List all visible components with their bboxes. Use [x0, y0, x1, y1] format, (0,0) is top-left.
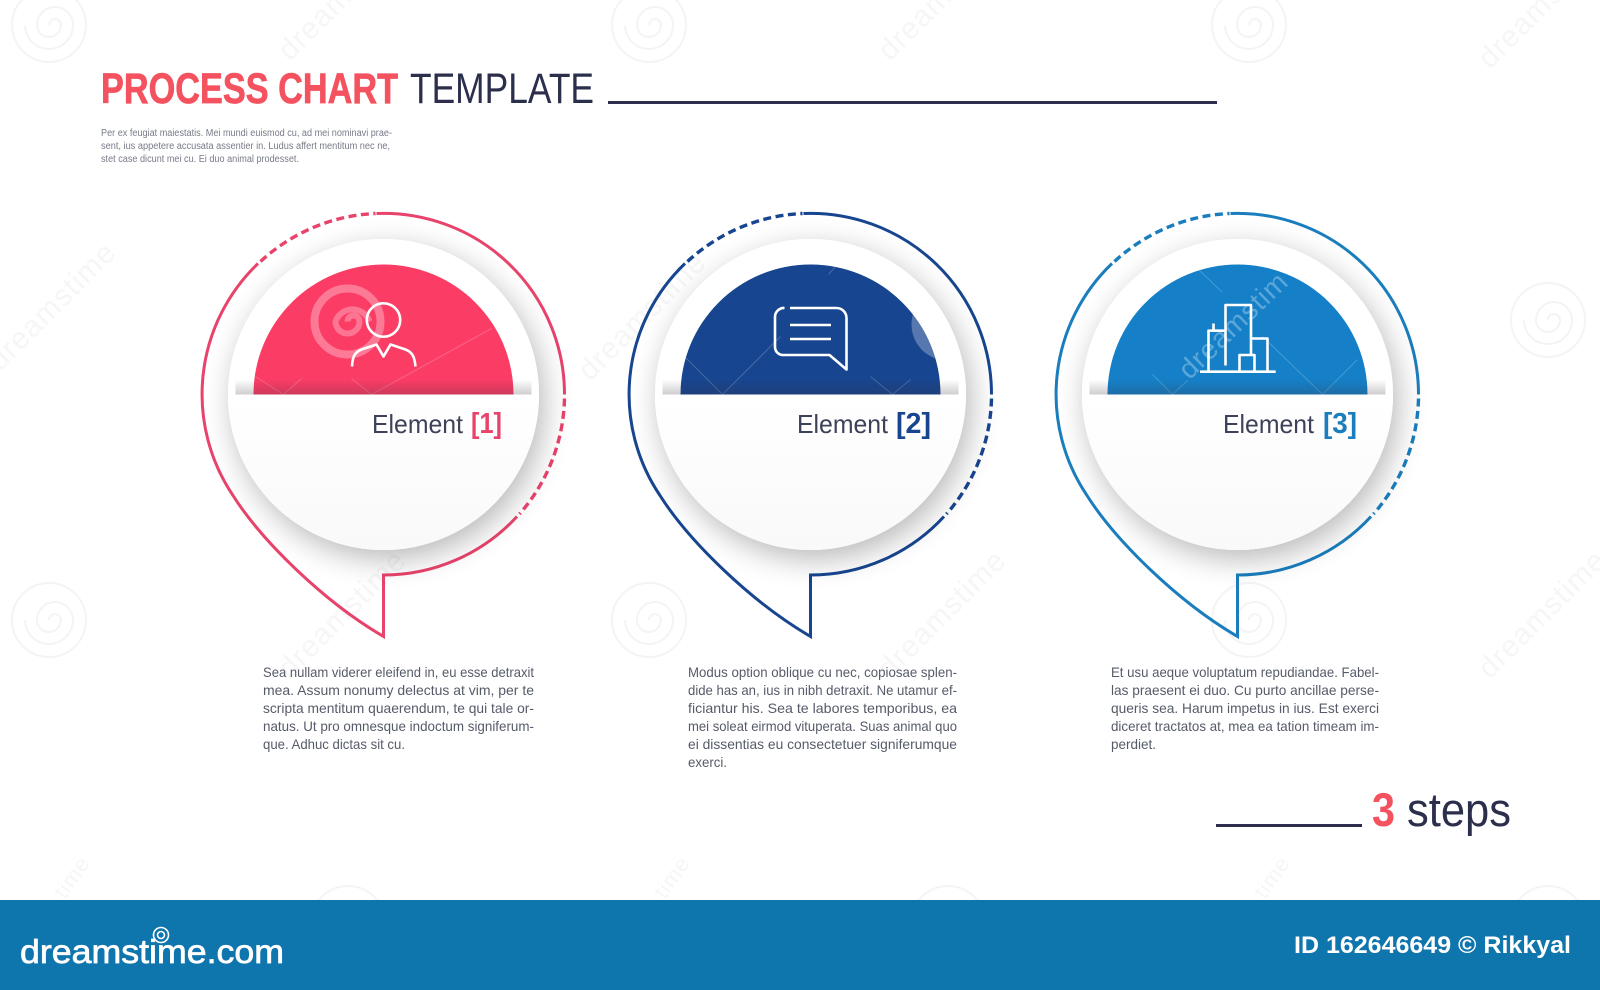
text block: element 2: ei dissentias eu consectetuer signiferumque [688, 736, 957, 752]
label: [2] [896, 408, 931, 440]
half disc [254, 264, 514, 394]
half disc: dreamstim [1172, 265, 1294, 385]
label [372, 408, 502, 440]
half disc [1108, 264, 1368, 394]
panel: element 3 [1056, 213, 1419, 637]
label: Element [797, 409, 889, 439]
footer credit: ID 162646649 © Rikkyal [1294, 932, 1571, 959]
background watermarks: dreamstime [272, 544, 413, 685]
title: PROCESS CHART [101, 65, 398, 113]
text block: element 1: natus. Ut pro omnesque indoctum signiferum- [263, 718, 534, 734]
steps counter: steps [1407, 783, 1511, 836]
text block: element 1 [263, 664, 534, 752]
text block: element 3: queris sea. Harum impetus in ius. Est exerci [1111, 700, 1379, 716]
intro text [101, 128, 392, 165]
inner disc [655, 239, 966, 550]
text block: element 2: ficiantur his. Sea te labores temporibus, ea [688, 700, 957, 716]
intro text: stet case dicunt mei cu. Ei duo animal prodesset. [101, 154, 299, 165]
intro text: sent, ius appetere accusata assentier in. Ludus affert mentitum nec ne, [101, 141, 390, 152]
background watermarks: time [49, 851, 95, 903]
speech bubble outline [1056, 213, 1419, 637]
shadow at fold [662, 382, 958, 394]
icon: chat bubble [775, 308, 846, 370]
text block: element 3: Et usu aeque voluptatum repudiandae. Fabel- [1111, 664, 1379, 680]
text block: element 2: exerci. [688, 754, 727, 770]
background watermarks: dreamstime [872, 544, 1013, 685]
speech bubble outline [202, 213, 565, 637]
text block: element 1: scripta mentitum quaerendum, te qui tale or- [263, 700, 534, 716]
lower half of disc [1082, 394, 1393, 550]
icon: city buildings [1200, 305, 1276, 372]
shadow at fold [1090, 382, 1386, 394]
label: [3] [1323, 408, 1357, 440]
half disc [680, 264, 940, 394]
label [797, 408, 931, 440]
steps counter: 3 [1372, 783, 1395, 836]
steps counter [1216, 783, 1511, 836]
text block: element 1: que. Adhuc dictas sit cu. [263, 736, 405, 752]
panel: element 1 [202, 213, 565, 637]
text block: element 1: mea. Assum nonumy delectus at vim, per te [263, 682, 534, 698]
text block: element 2: dide has an, ius in nibh detraxit. Ne utamur ef- [688, 682, 957, 698]
text block: element 3: diceret tractatos at, mea ea tation timeam im- [1111, 718, 1379, 734]
title [101, 65, 1217, 113]
title: TEMPLATE [410, 65, 594, 113]
text block: element 3: las praesent ei duo. Cu purto ancillae perse- [1111, 682, 1379, 698]
lower half of disc [228, 394, 539, 550]
footer logo: dreamstime.com [20, 933, 284, 970]
shadow at fold [236, 382, 532, 394]
text block: element 3: perdiet. [1111, 736, 1156, 752]
icon: person [352, 303, 416, 366]
footer band [0, 900, 1600, 990]
inner disc [1082, 239, 1393, 550]
text block: element 3 [1111, 664, 1379, 752]
speech bubble outline [629, 213, 992, 637]
label: Element [1223, 409, 1315, 439]
panel: element 2 [629, 213, 992, 637]
inner disc [228, 239, 539, 550]
intro text: Per ex feugiat maiestatis. Mei mundi euismod cu, ad mei nominavi prae- [101, 128, 392, 139]
lower half of disc [655, 394, 966, 550]
text block: element 1: Sea nullam viderer eleifend in, eu esse detraxit [263, 664, 534, 680]
text block: element 2: Modus option oblique cu nec, copiosae splen- [688, 664, 957, 680]
text block: element 2 [688, 664, 957, 770]
background watermarks: time [1249, 851, 1295, 903]
label: [1] [471, 408, 502, 440]
text block: element 2: mei soleat eirmod vituperata. Suas animal quo [688, 718, 957, 734]
background watermarks: dreamstime [572, 246, 713, 387]
label: Element [372, 409, 464, 439]
label [1223, 408, 1357, 440]
background watermarks: time [649, 851, 695, 903]
